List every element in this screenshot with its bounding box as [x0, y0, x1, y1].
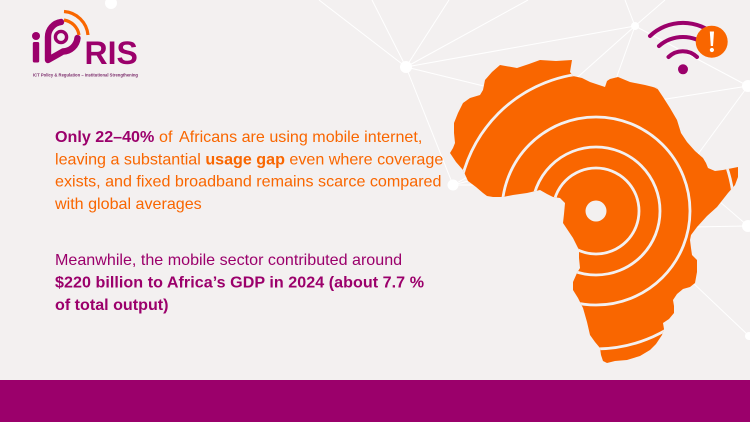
- text block: usage gap: Africans are using mobile internet,: [179, 128, 422, 146]
- text block: usage gap: with global averages: [54, 195, 202, 213]
- footer bar: [0, 380, 750, 422]
- logo: iPRIS: [32, 12, 138, 78]
- text block: GDP contribution: Meanwhile, the mobile sector contributed around: [55, 251, 402, 269]
- text block: usage gap: leaving a substantial usage gap even where coverage: [55, 150, 443, 168]
- icon: wifi warning: [650, 23, 728, 74]
- logo icon: i with signal bubble: [32, 12, 88, 62]
- text block: GDP contribution: [55, 251, 424, 314]
- logo tagline: ICT Policy & Regulation – Institutional Strengthening: [33, 72, 138, 78]
- text block: usage gap: exists, and fixed broadband remains scarce compared: [55, 173, 441, 191]
- text block: usage gap: Only 22–40%: [55, 128, 154, 146]
- text block: usage gap: [54, 128, 443, 213]
- map: Africa with signal rings: [450, 60, 738, 363]
- text block: GDP contribution: of total output): [55, 296, 169, 314]
- network background: [105, 0, 750, 340]
- text block: GDP contribution: $220 billion to Africa’s GDP in 2024 (about 7.7 %: [55, 274, 424, 292]
- text block: usage gap: of: [159, 128, 173, 146]
- logo wordmark: RIS: [84, 35, 138, 71]
